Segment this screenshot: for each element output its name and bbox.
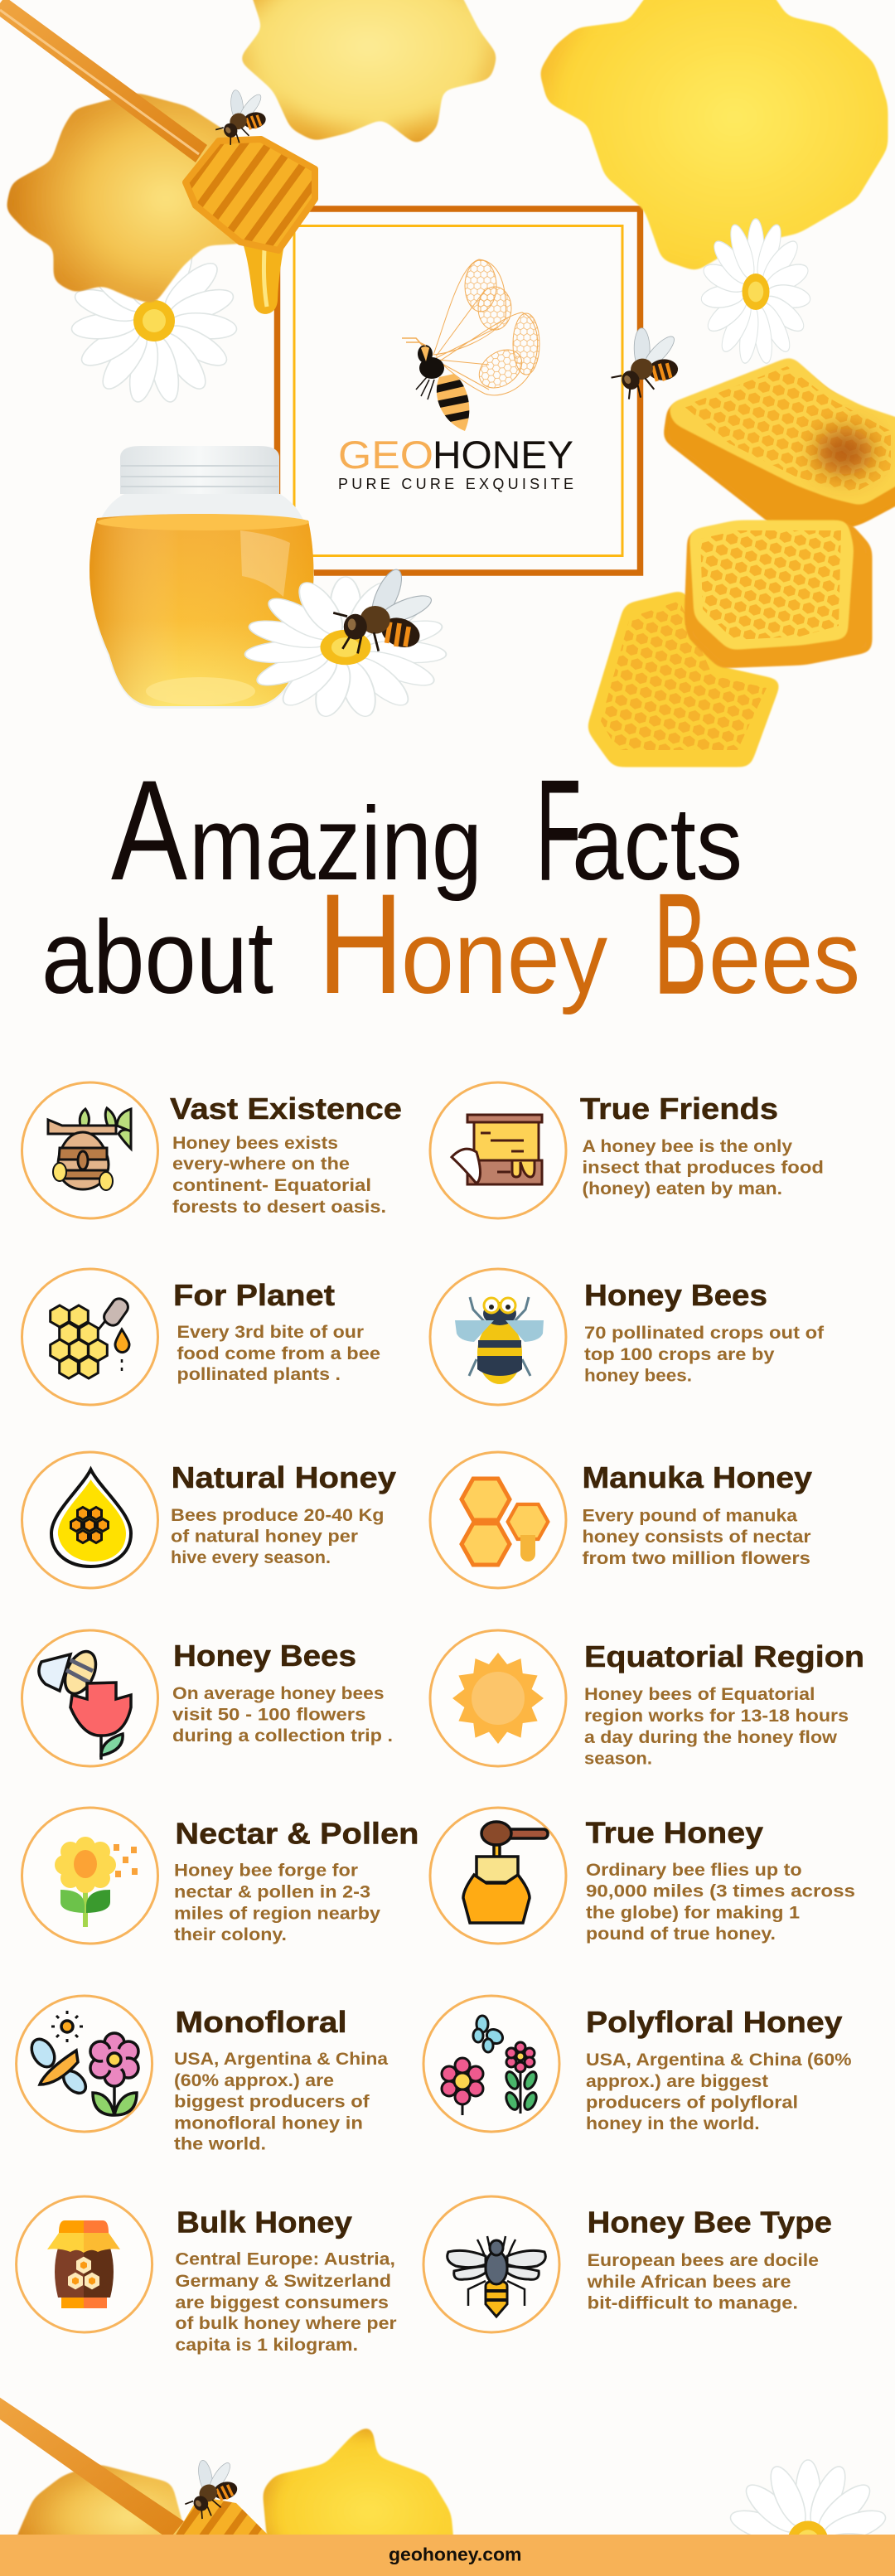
- description: European bees are docile: [588, 2250, 819, 2270]
- description: honey consists of nectar: [582, 1527, 811, 1547]
- icon: honey cells: [462, 1479, 548, 1565]
- title line 2: about: about: [41, 900, 273, 1015]
- description: their colony.: [174, 1925, 287, 1944]
- description: Honey bees exists: [172, 1133, 338, 1153]
- description: nectar & pollen in 2-3: [174, 1882, 370, 1902]
- description: Honey bees of Equatorial: [584, 1684, 815, 1704]
- description: Honey bee forge for: [174, 1861, 359, 1881]
- description: top 100 crops are by: [584, 1344, 775, 1364]
- panel: True Honey: [430, 1808, 855, 1944]
- panel: Bulk Honey: [17, 2196, 397, 2355]
- panel: Vast Existence: [22, 1082, 402, 1218]
- description: (honey) eaten by man.: [582, 1179, 782, 1198]
- footer website: geohoney.com: [389, 2545, 522, 2564]
- heading: Equatorial Region: [584, 1639, 864, 1673]
- honey drip: [240, 236, 286, 314]
- description: season.: [584, 1749, 652, 1769]
- honey splash: top right: [539, 0, 888, 271]
- description: [174, 2049, 389, 2154]
- panel: Honey Bees (crops): [430, 1269, 825, 1405]
- description: [172, 1683, 393, 1746]
- footer honey pool: [17, 2463, 183, 2535]
- description: from two million flowers: [582, 1548, 810, 1568]
- panel: Equatorial Region: [430, 1630, 864, 1769]
- heading: Natural Honey: [172, 1460, 396, 1494]
- description: insect that produces food: [582, 1157, 824, 1177]
- description: [172, 1133, 386, 1217]
- icon: bee and flower: [39, 1647, 131, 1760]
- heading: Nectar & Pollen: [175, 1817, 418, 1850]
- description: during a collection trip .: [172, 1726, 393, 1746]
- description: [584, 1684, 849, 1769]
- description: 70 pollinated crops out of: [584, 1323, 825, 1343]
- footer dipper: [0, 2392, 273, 2540]
- panel: For Planet: [22, 1269, 380, 1405]
- panel: Polyfloral Honey: [423, 1996, 852, 2133]
- description: Bees produce 20-40 Kg: [171, 1505, 385, 1525]
- logo: GeoHoney: HONEY: [433, 433, 573, 477]
- footer yellow splash: [262, 2428, 454, 2535]
- description: [586, 2050, 852, 2133]
- description: Every pound of manuka: [582, 1506, 798, 1526]
- heading: For Planet: [173, 1278, 335, 1312]
- description: approx.) are biggest: [586, 2071, 768, 2091]
- description: the globe) for making 1: [586, 1903, 800, 1923]
- logo bee body: [402, 337, 469, 431]
- logo frame: [277, 209, 640, 573]
- description: Ordinary bee flies up to: [586, 1860, 802, 1880]
- honey dipper: [0, 0, 315, 314]
- title line 2: Honey Bees: ees: [709, 900, 860, 1015]
- heading: True Friends: [580, 1092, 778, 1126]
- description: Every 3rd bite of our: [177, 1322, 365, 1342]
- description: [584, 1323, 825, 1386]
- panel: Honey Bee Type: [423, 2196, 832, 2332]
- icon: honey pot and dipper: [463, 1822, 548, 1923]
- dipper head: [186, 139, 315, 250]
- panel: Manuka Honey: [430, 1452, 812, 1588]
- description: [175, 2249, 397, 2355]
- title line 2: Honey Bees: H: [317, 864, 404, 1024]
- title line 1: A: [111, 751, 187, 910]
- footer bee: [185, 2460, 237, 2520]
- title line 1: mazing: [189, 787, 482, 902]
- bee: top left: [202, 78, 278, 150]
- description: food come from a bee: [177, 1344, 380, 1363]
- honey jar: [90, 446, 314, 709]
- icon: sun: [452, 1653, 544, 1744]
- panel: True Friends: [430, 1082, 824, 1218]
- jar honey: [90, 514, 313, 706]
- heading: True Honey: [586, 1815, 763, 1849]
- title: [41, 751, 860, 1024]
- description: pollinated plants .: [177, 1364, 341, 1384]
- heading: Honey Bees: [173, 1639, 356, 1673]
- description: [171, 1505, 385, 1567]
- logo wordmark: GEO: [338, 433, 433, 477]
- description: [174, 1861, 380, 1944]
- icon: bee box: [452, 1115, 542, 1184]
- description: [177, 1322, 380, 1384]
- logo tagline: PURE CURE EXQUISITE: [338, 476, 573, 492]
- jar glass: [90, 494, 314, 709]
- icon: hive on branch: [48, 1108, 131, 1190]
- description: continent- Equatorial: [172, 1175, 371, 1195]
- footer illustration: [0, 2397, 887, 2535]
- icon: flower with pollen: [55, 1837, 138, 1927]
- description: capita is 1 kilogram.: [175, 2335, 358, 2355]
- description: 90,000 miles (3 times across: [586, 1881, 855, 1901]
- title line 1: acts: [572, 787, 743, 902]
- icon: bee, sun and flower: [27, 2011, 138, 2115]
- jar base highlight: [146, 677, 255, 705]
- description: producers of polyfloral: [586, 2093, 798, 2113]
- description: while African bees are: [587, 2272, 791, 2292]
- honeycomb: middle: [685, 521, 872, 668]
- description: [587, 2250, 819, 2313]
- honey splash: top centre: [239, 0, 497, 145]
- bee: right: [597, 313, 693, 405]
- logo bee wings: [433, 259, 539, 395]
- description: visit 50 - 100 flowers: [172, 1705, 366, 1725]
- icon: honey drop: [51, 1470, 131, 1566]
- icon: cartoon bee: [455, 1297, 544, 1384]
- description: USA, Argentina & China: [174, 2049, 389, 2069]
- heading: Polyfloral Honey: [586, 2005, 842, 2039]
- title line 1: [111, 751, 743, 910]
- icon: honeycomb and dipper: [51, 1295, 131, 1378]
- panel: Nectar & Pollen: [22, 1808, 418, 1944]
- daisy: bottom with bee: [244, 566, 448, 719]
- description: region works for 13-18 hours: [584, 1706, 849, 1726]
- description: pound of true honey.: [586, 1924, 776, 1944]
- description: of bulk honey where per: [175, 2313, 397, 2333]
- description: On average honey bees: [172, 1683, 385, 1703]
- icon: bee from above: [448, 2236, 545, 2317]
- footer bar: [0, 2535, 895, 2576]
- title line 2: Honey Bees: B: [654, 864, 707, 1024]
- panel: Honey Bees (visits): [22, 1630, 393, 1766]
- honey splash: left pool: [6, 93, 249, 304]
- footer daisy: [729, 2459, 887, 2535]
- description: honey in the world.: [586, 2114, 760, 2133]
- honeycomb: bottom: [587, 590, 781, 767]
- heading: Honey Bee Type: [588, 2205, 832, 2239]
- description: a day during the honey flow: [584, 1727, 837, 1747]
- heading: Monofloral: [175, 2005, 347, 2039]
- dipper handle: [0, 0, 207, 162]
- description: monofloral honey in: [174, 2113, 363, 2133]
- panel: Natural Honey: [22, 1452, 396, 1588]
- description: forests to desert oasis.: [172, 1197, 386, 1217]
- heading: Bulk Honey: [177, 2205, 352, 2239]
- daisy: left: [70, 238, 238, 404]
- description: of natural honey per: [171, 1527, 359, 1547]
- description: [586, 1860, 855, 1944]
- description: Central Europe: Austria,: [175, 2249, 395, 2269]
- description: A honey bee is the only: [582, 1136, 792, 1156]
- title line 2: Honey Bees: oney: [401, 900, 607, 1015]
- description: [582, 1136, 824, 1198]
- honeycomb: top: [663, 356, 895, 543]
- description: honey bees.: [584, 1366, 692, 1386]
- heading: Honey Bees: [584, 1278, 767, 1312]
- description: bit-difficult to manage.: [588, 2293, 798, 2313]
- description: miles of region nearby: [174, 1904, 380, 1924]
- description: Germany & Switzerland: [175, 2271, 391, 2291]
- icon: honey jar with cloth lid: [47, 2220, 120, 2308]
- description: the world.: [174, 2134, 266, 2154]
- description: every-where on the: [172, 1154, 350, 1174]
- icon: flowers and butterfly: [442, 2016, 539, 2115]
- heading: Manuka Honey: [582, 1460, 812, 1494]
- description: USA, Argentina & China (60%: [586, 2050, 852, 2070]
- description: are biggest consumers: [175, 2293, 389, 2312]
- heading: Vast Existence: [170, 1092, 402, 1126]
- title line 2: Honey Bees: [317, 864, 860, 1024]
- panel: Monofloral: [17, 1996, 389, 2154]
- description: biggest producers of: [174, 2092, 370, 2112]
- logo: GeoHoney: [338, 259, 573, 492]
- description: [582, 1506, 811, 1568]
- jar lid: [120, 446, 279, 494]
- title line 1: F: [536, 751, 581, 910]
- description: (60% approx.) are: [174, 2070, 334, 2090]
- description: hive every season.: [171, 1547, 331, 1567]
- daisy: right: [700, 219, 811, 366]
